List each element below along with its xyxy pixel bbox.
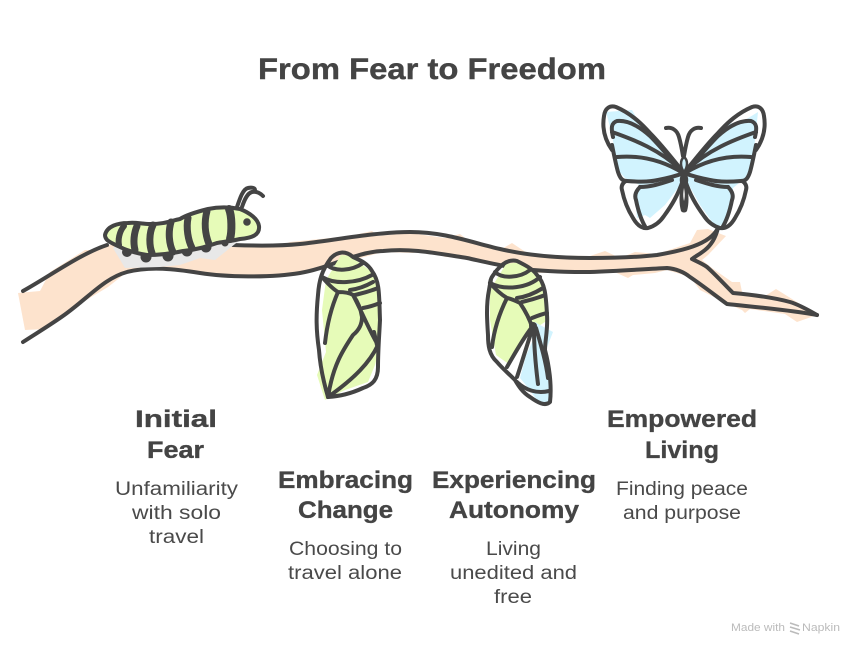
chrysalis 2 outline [487, 260, 551, 404]
chrysalis 2 wing knot [529, 322, 537, 330]
chrysalis 1 wing lines [322, 277, 378, 397]
watermark [731, 622, 840, 634]
step 4 description: Finding peace [616, 479, 748, 500]
step 2: embracing change: Change [298, 497, 393, 524]
chrysalis 2 white wing gaps [507, 335, 533, 378]
watermark: Made with [731, 622, 785, 634]
step 3: experiencing autonomy: unedited and [450, 563, 577, 584]
chrysalis 2 blue wing fill [520, 322, 553, 404]
chrysalis 2 fill [490, 262, 548, 365]
step 3: experiencing autonomy [432, 467, 596, 608]
branch fill [18, 229, 817, 330]
butterfly blue fills [606, 110, 684, 218]
step 1 description: Unfamiliarity [115, 479, 239, 500]
caterpillar segments [119, 209, 231, 253]
branch bottom outline [23, 250, 817, 342]
caterpillar [105, 188, 263, 268]
butterfly body [680, 157, 688, 212]
chrysalis 2 [487, 260, 553, 404]
butterfly [603, 106, 765, 228]
caterpillar body [105, 208, 259, 255]
step 1: initial fear [115, 406, 239, 548]
caterpillar shadow [113, 235, 240, 268]
step 3: experiencing autonomy: Autonomy [449, 497, 580, 524]
caterpillar antennae [237, 188, 263, 207]
chrysalis 1 bands [322, 263, 380, 308]
butterfly antennae [666, 128, 701, 156]
caterpillar eye [243, 218, 251, 226]
step 2 heading: Embracing [278, 467, 413, 494]
step 2: embracing change [278, 467, 413, 584]
step 1: initial fear: with solo [131, 503, 221, 524]
step 2 description: Choosing to [289, 539, 402, 560]
caterpillar feet [122, 240, 228, 262]
butterfly right wings [684, 106, 765, 228]
step 4: empowered living: and purpose [623, 503, 741, 524]
branch fork outline [692, 228, 817, 315]
step 1 heading: Initial [135, 406, 217, 433]
step 3: experiencing autonomy: free [494, 587, 532, 608]
step 2: embracing change: travel alone [288, 563, 402, 584]
chrysalis 2 bands [490, 270, 547, 318]
branch top outline [23, 228, 718, 291]
step 1: initial fear: travel [149, 527, 204, 548]
chrysalis 1 fill [317, 255, 381, 400]
step 3 description: Living [486, 539, 541, 560]
watermark: Napkin [802, 622, 840, 634]
step 4 heading: Empowered [607, 406, 757, 433]
step 4: empowered living: Living [645, 437, 719, 464]
chrysalis 2 wing lines [490, 283, 532, 347]
chrysalis 1 outline [317, 253, 380, 397]
title: From Fear to Freedom [258, 53, 606, 86]
step 4: empowered living [607, 406, 757, 524]
icon: napkin logo [790, 623, 800, 634]
chrysalis 2 emerging wing veins [507, 327, 549, 392]
step 3 heading: Experiencing [432, 467, 596, 494]
branch [18, 228, 817, 342]
butterfly left wings [603, 106, 684, 228]
step 1: initial fear: Fear [147, 437, 204, 464]
chrysalis 1 [317, 253, 381, 400]
